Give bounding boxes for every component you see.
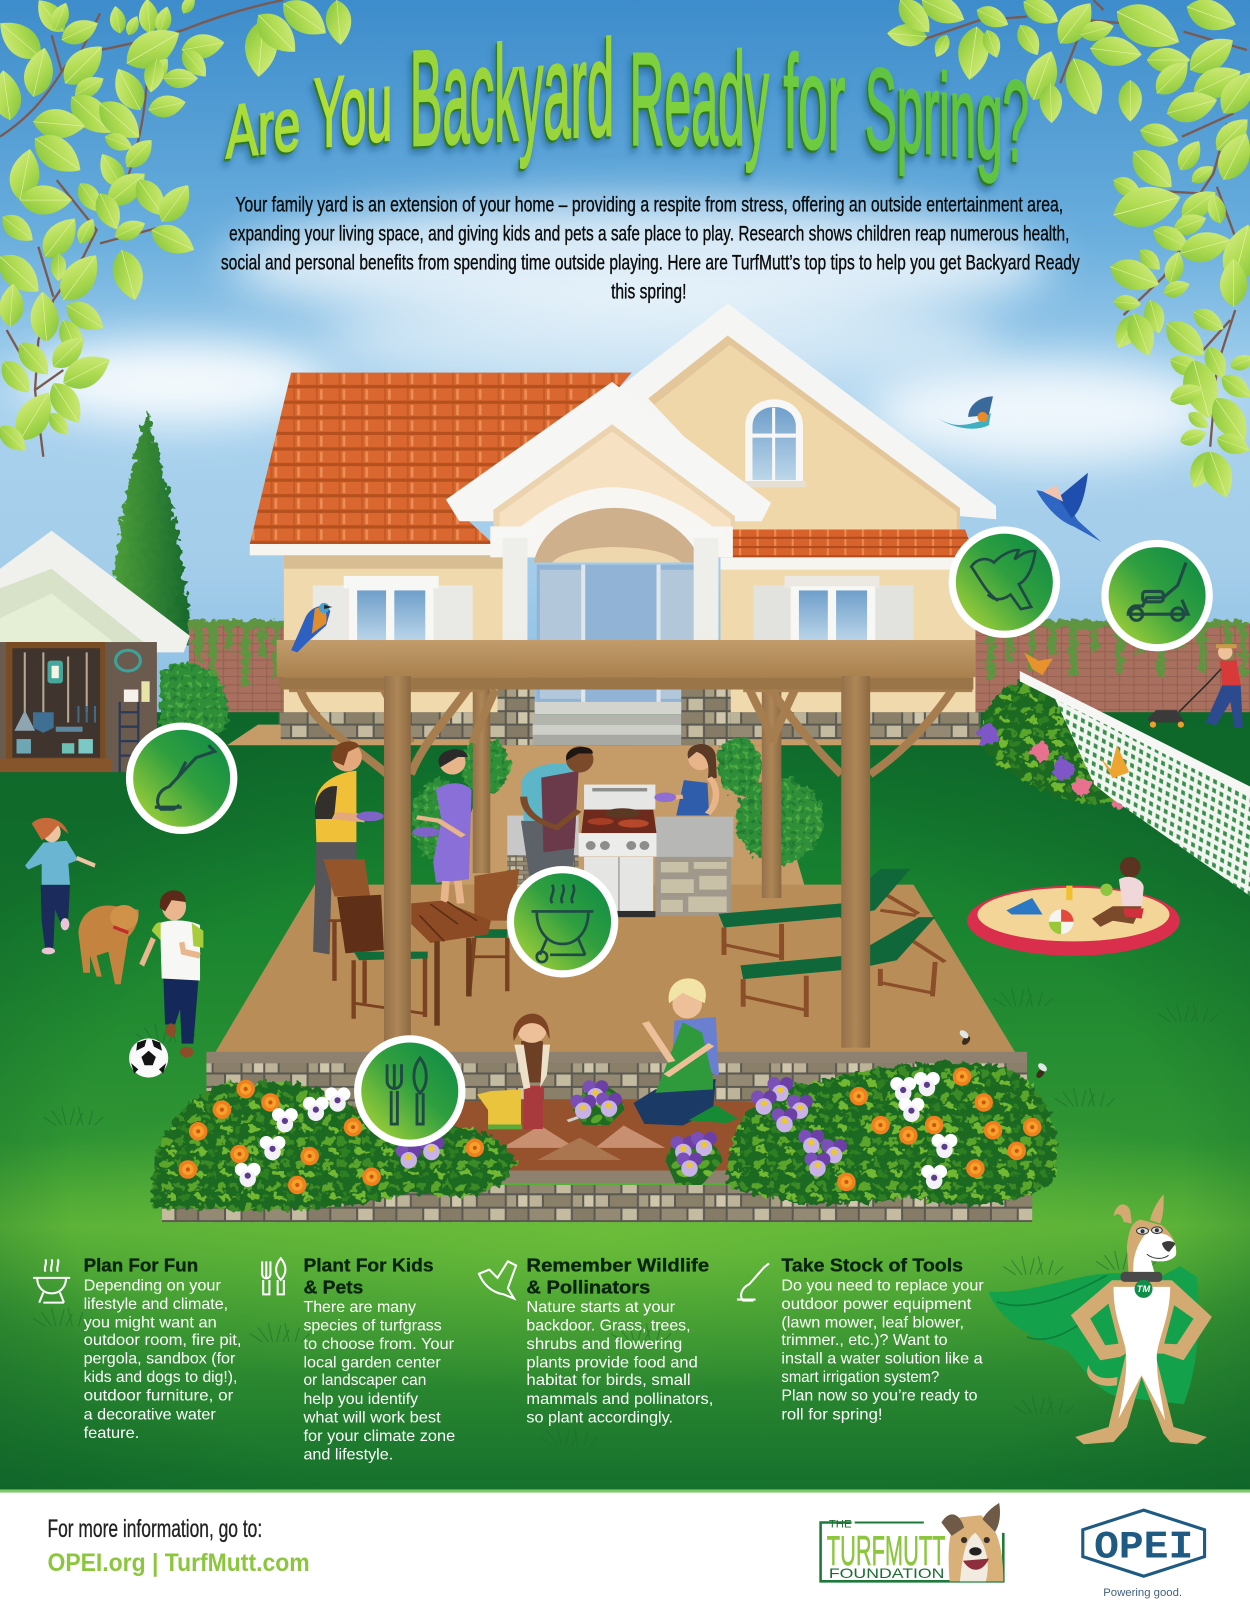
arm gaps xyxy=(1090,1304,1194,1345)
house xyxy=(250,303,996,745)
tip: remember wildlife and pollinators: backdoor. Grass, trees, xyxy=(526,1318,691,1335)
tip: plant for kids and pets: There are many xyxy=(303,1299,416,1316)
rear posts xyxy=(473,690,490,873)
icon: trimmer xyxy=(737,1263,769,1301)
side flower bed xyxy=(979,681,1130,808)
footer text: For more information, go to: xyxy=(47,1516,262,1543)
patio table and chairs xyxy=(323,859,519,1026)
left window xyxy=(313,576,473,645)
sandbox xyxy=(967,857,1180,956)
steps xyxy=(533,702,681,745)
hose xyxy=(116,650,140,671)
tools xyxy=(14,652,95,754)
tip: take stock of tools: smart irrigation system? xyxy=(781,1369,940,1386)
OPEI logo: Powering good. xyxy=(1103,1587,1182,1599)
tip: plan for fun xyxy=(33,1255,242,1442)
ears xyxy=(1114,1194,1164,1224)
shed body xyxy=(0,642,157,772)
grass tufts xyxy=(33,988,1218,1445)
table xyxy=(411,901,491,1026)
dog photo xyxy=(941,1503,1003,1581)
arched window xyxy=(742,399,806,487)
golden dog xyxy=(78,905,139,984)
man mowing xyxy=(1148,645,1243,728)
OPEI logo: OPEI xyxy=(1094,1525,1193,1570)
rear chair xyxy=(469,869,519,996)
tip: take stock of tools: Do you need to replace your xyxy=(781,1277,984,1294)
flower bed left xyxy=(153,1080,516,1211)
head xyxy=(1127,1220,1176,1275)
brick wall left xyxy=(189,623,287,725)
title: You xyxy=(314,51,392,170)
bees xyxy=(958,1029,1048,1079)
brick wall right with ivy xyxy=(975,623,1250,714)
tail xyxy=(1087,1365,1118,1386)
tip: plant for kids and pets: for your climate zone xyxy=(303,1428,455,1445)
tip: take stock of tools: roll for spring! xyxy=(781,1406,883,1423)
woman in purple xyxy=(412,749,472,903)
title: Ready xyxy=(630,25,769,173)
ladder xyxy=(120,702,138,772)
intro paragraph: this spring! xyxy=(611,278,686,303)
grill xyxy=(507,785,733,917)
tip: plan for fun: outdoor furniture, or xyxy=(84,1388,233,1405)
columns xyxy=(503,534,527,686)
tip: plan for fun: outdoor room, fire pit, xyxy=(84,1332,242,1349)
garden scene figures xyxy=(477,978,738,1160)
girl xyxy=(513,1014,550,1129)
shed xyxy=(0,531,190,772)
gardener xyxy=(633,978,738,1126)
right lower roof xyxy=(720,530,975,557)
tip: plan for fun: Plan For Fun xyxy=(84,1255,198,1276)
left counter xyxy=(507,816,579,855)
tip: remember wildlife and pollinators: Remember Wildlife xyxy=(526,1255,709,1276)
shed roof xyxy=(0,531,190,652)
left foliage xyxy=(0,0,353,458)
front pergola posts xyxy=(384,676,411,1044)
icon circle: lawn mower xyxy=(1101,540,1213,651)
tip: plant for kids and pets: help you identify xyxy=(303,1391,418,1408)
tip: plan for fun: Depending on your xyxy=(84,1277,221,1294)
TurfMutt Foundation logo: FOUNDATION xyxy=(829,1566,944,1581)
TurfMutt mascot xyxy=(989,1194,1212,1444)
flying bird large xyxy=(1036,473,1101,542)
rear lounger xyxy=(718,869,919,960)
woman in blue xyxy=(654,744,717,816)
upper stone wall xyxy=(206,1052,1027,1115)
tip: plant for kids and pets: local garden center xyxy=(303,1355,441,1372)
tip: remember wildlife and pollinators: shrubs and flowering xyxy=(526,1336,682,1353)
stone base detail xyxy=(661,862,727,912)
tip: plan for fun: feature. xyxy=(84,1425,139,1442)
eyes and nose xyxy=(1137,1227,1175,1258)
children and dog at left xyxy=(25,818,203,1057)
OPEI logo xyxy=(1083,1510,1205,1599)
clouds xyxy=(21,201,1218,465)
tip: take stock of tools: (lawn mower, leaf blower, xyxy=(781,1314,964,1331)
tip: take stock of tools: outdoor power equipment xyxy=(781,1296,972,1313)
controls xyxy=(579,833,656,857)
lawn xyxy=(0,712,1250,1492)
tip: take stock of tools: install a water solution like a xyxy=(781,1351,983,1368)
icon circle: bird xyxy=(949,526,1060,638)
running girl xyxy=(25,818,95,954)
foundation xyxy=(279,712,498,739)
title: Are xyxy=(226,81,300,174)
shrubs behind patio xyxy=(412,737,823,864)
icon: bird xyxy=(479,1261,516,1299)
sun loungers xyxy=(718,869,945,1017)
front chair xyxy=(337,895,428,1019)
cypress tree xyxy=(110,408,190,645)
footer band xyxy=(0,1489,1250,1618)
TurfMutt Foundation logo: TURFMUTT xyxy=(827,1528,945,1574)
rear patio xyxy=(444,745,805,888)
pansies in soil xyxy=(570,1080,723,1185)
icon: grill xyxy=(33,1259,70,1303)
main patio deck xyxy=(214,885,1017,1055)
footer text: OPEI.org | TurfMutt.com xyxy=(47,1550,310,1577)
tip: remember wildlife and pollinators: plants provide food and xyxy=(526,1355,698,1372)
back left chair xyxy=(323,859,370,981)
brackets xyxy=(289,686,972,774)
icon: tools xyxy=(262,1258,285,1294)
collar xyxy=(1121,1272,1162,1282)
tip: remember wildlife and pollinators xyxy=(479,1255,713,1426)
tip: plan for fun: lifestyle and climate, xyxy=(84,1296,228,1313)
tip: remember wildlife and pollinators: & Pollinators xyxy=(526,1276,650,1297)
tip: take stock of tools: Plan now so you’re ready to xyxy=(781,1388,977,1405)
pergola xyxy=(277,640,975,898)
title: for xyxy=(783,28,845,179)
right foliage xyxy=(886,0,1250,502)
running boy xyxy=(142,890,203,1057)
intro paragraph xyxy=(221,192,1080,303)
porch arch xyxy=(490,487,733,557)
lattice fence xyxy=(1051,690,1250,896)
path along house xyxy=(227,725,981,745)
porch door glass xyxy=(537,565,694,702)
tip: plant for kids and pets: species of turfgrass xyxy=(303,1318,442,1335)
cabinet xyxy=(584,857,653,911)
tip: plan for fun: you might want an xyxy=(84,1314,217,1331)
left fascia xyxy=(250,544,498,555)
hood xyxy=(584,785,655,809)
footer text xyxy=(47,1516,310,1577)
cape xyxy=(989,1266,1198,1404)
icon circle: trimmer xyxy=(126,723,237,834)
main roof xyxy=(250,373,632,544)
people at the grill xyxy=(313,741,717,954)
tip: plant for kids and pets: and lifestyle. xyxy=(303,1447,393,1464)
lower stone wall xyxy=(162,1171,1032,1222)
icon circle: grill xyxy=(507,866,618,978)
tip: plant for kids and pets xyxy=(262,1255,455,1464)
tip: plant for kids and pets: Plant For Kids xyxy=(303,1255,434,1276)
upper gable xyxy=(619,303,996,530)
tip: remember wildlife and pollinators: mammals and pollinators, xyxy=(526,1391,713,1408)
tip: plant for kids and pets: & Pets xyxy=(303,1276,363,1297)
TurfMutt Foundation logo: THE xyxy=(829,1519,852,1531)
top beam xyxy=(277,640,975,677)
front porch gable xyxy=(446,382,771,521)
watering can xyxy=(477,1089,522,1129)
child in sandbox xyxy=(1066,857,1144,927)
entry piers xyxy=(498,690,535,745)
sky background xyxy=(0,0,1250,784)
badge xyxy=(1135,1280,1153,1298)
flying bird small xyxy=(937,396,993,429)
tip: plant for kids and pets: what will work best xyxy=(302,1409,441,1426)
right counter xyxy=(655,817,733,857)
tip: plan for fun: a decorative water xyxy=(84,1406,216,1423)
tip: plant for kids and pets: to choose from. Your xyxy=(303,1336,454,1353)
title xyxy=(226,12,1029,187)
front lounger xyxy=(740,917,945,1017)
man with plate xyxy=(313,741,384,954)
spray bottles xyxy=(124,681,150,702)
walls xyxy=(284,555,975,714)
tip: take stock of tools: trimmer., etc.)? Want to xyxy=(781,1332,948,1349)
icon circle: garden tools xyxy=(354,1035,466,1147)
tip: plan for fun: pergola, sandbox (for xyxy=(84,1351,235,1368)
tip: plant for kids and pets: or landscaper can xyxy=(303,1372,426,1389)
dirt piles xyxy=(502,1126,665,1160)
garden soil xyxy=(243,1099,908,1175)
tip: take stock of tools: Take Stock of Tools xyxy=(781,1255,963,1276)
bird on beam xyxy=(291,603,332,652)
body xyxy=(1071,1280,1212,1444)
bucket xyxy=(1006,898,1043,915)
hedge beside shed xyxy=(160,662,229,735)
badge: TM xyxy=(1137,1284,1151,1294)
tip: plan for fun: kids and dogs to dig!), xyxy=(84,1369,237,1386)
right window xyxy=(754,576,914,645)
tip: take stock of tools xyxy=(737,1255,984,1423)
beach ball xyxy=(1049,909,1073,934)
TurfMutt Foundation logo xyxy=(821,1503,1003,1581)
flower bed right xyxy=(727,1062,1057,1204)
tip: remember wildlife and pollinators: so plant accordingly. xyxy=(526,1409,673,1426)
hand fork xyxy=(568,1115,584,1121)
tip: remember wildlife and pollinators: habitat for birds, small xyxy=(526,1372,691,1389)
soccer ball xyxy=(129,1038,168,1078)
griller xyxy=(521,746,593,876)
butterflies xyxy=(1024,652,1129,778)
cooking surface xyxy=(581,810,656,833)
tip: remember wildlife and pollinators: Nature starts at your xyxy=(526,1299,675,1316)
